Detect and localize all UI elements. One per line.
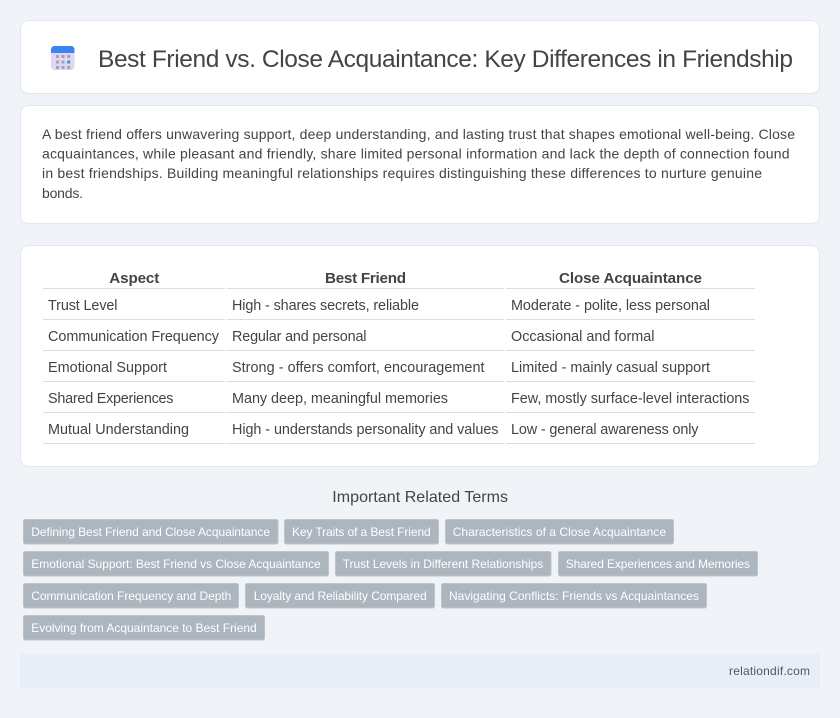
tag: loyalty: Loyalty and Reliability Compared <box>254 589 427 603</box>
row: shared experiences: Shared Experiences <box>48 391 174 407</box>
row: communication frequency: Communication Frequency <box>48 329 220 345</box>
tag: characteristics: Characteristics of a Close Acquaintance <box>453 525 666 539</box>
intro paragraph: in best friendships. Building meaningful relationships requires distinguishing these differences to nurture genuine <box>42 165 762 181</box>
row: emotional support: Emotional Support <box>48 360 167 376</box>
panel: introduction <box>20 106 820 224</box>
intro paragraph: A best friend offers unwavering support, deep understanding, and lasting trust that shapes emotional well-being. Close <box>42 126 795 142</box>
tag: conflicts <box>442 584 706 608</box>
row: emotional support <box>43 360 755 382</box>
row: emotional support: Limited - mainly casual support <box>511 360 710 376</box>
intro paragraph: acquaintances, while pleasant and friendly, share limited personal information and lack the depth of connection found <box>42 146 790 162</box>
row: communication frequency: Occasional and formal <box>511 329 654 345</box>
intro paragraph <box>42 126 795 201</box>
tag: trust levels <box>336 552 551 576</box>
row: mutual understanding: Low - general awareness only <box>511 422 699 438</box>
tag: evolving <box>24 616 264 640</box>
tag: emotional support <box>24 552 328 576</box>
table header row: Close Acquaintance <box>559 270 702 287</box>
row: emotional support: Strong - offers comfort, encouragement <box>232 360 484 376</box>
tag: communication <box>24 584 238 608</box>
tag: communication: Communication Frequency and Depth <box>31 589 231 603</box>
tag: defining: Defining Best Friend and Close Acquaintance <box>31 525 270 539</box>
row: shared experiences <box>43 391 755 413</box>
intro paragraph: bonds. <box>42 185 83 201</box>
table header row: Best Friend <box>325 270 406 287</box>
row: communication frequency: Regular and personal <box>232 329 366 345</box>
title: Best Friend vs. Close Acquaintance: Key Differences in Friendship <box>98 46 793 73</box>
row: mutual understanding: High - understands personality and values <box>232 422 498 438</box>
panel: header <box>20 20 820 94</box>
footer source text: relationdif.com <box>729 664 810 678</box>
row: mutual understanding <box>43 422 755 444</box>
footer bar <box>20 654 820 688</box>
tag: trust levels: Trust Levels in Different Relationships <box>343 557 543 571</box>
table header row <box>43 270 755 289</box>
panel: comparison table <box>20 246 820 466</box>
tag: emotional support: Emotional Support: Best Friend vs Close Acquaintance <box>31 557 321 571</box>
row: trust level: Trust Level <box>48 298 118 314</box>
tag: evolving: Evolving from Acquaintance to Best Friend <box>31 621 257 635</box>
row: shared experiences: Few, mostly surface-level interactions <box>511 391 750 407</box>
row: trust level: Moderate - polite, less personal <box>511 298 710 314</box>
row: communication frequency <box>43 329 755 351</box>
table header row: Aspect <box>109 270 159 287</box>
tag: shared experiences: Shared Experiences and Memories <box>566 557 750 571</box>
tag: characteristics <box>446 520 674 544</box>
tag: defining <box>24 520 278 544</box>
tag: key traits: Key Traits of a Best Friend <box>292 525 431 539</box>
tag: shared experiences <box>558 552 758 576</box>
row: trust level: High - shares secrets, reliable <box>232 298 419 314</box>
tag: loyalty <box>246 584 434 608</box>
panel: related term tags <box>24 520 758 640</box>
icon: calendar <box>51 46 74 70</box>
heading: important related terms: Important Related Terms <box>332 489 508 506</box>
tag: conflicts: Navigating Conflicts: Friends vs Acquaintances <box>449 589 699 603</box>
row: trust level <box>43 298 755 320</box>
row: shared experiences: Many deep, meaningful memories <box>232 391 448 407</box>
row: mutual understanding: Mutual Understanding <box>48 422 189 438</box>
tag: key traits <box>284 520 438 544</box>
